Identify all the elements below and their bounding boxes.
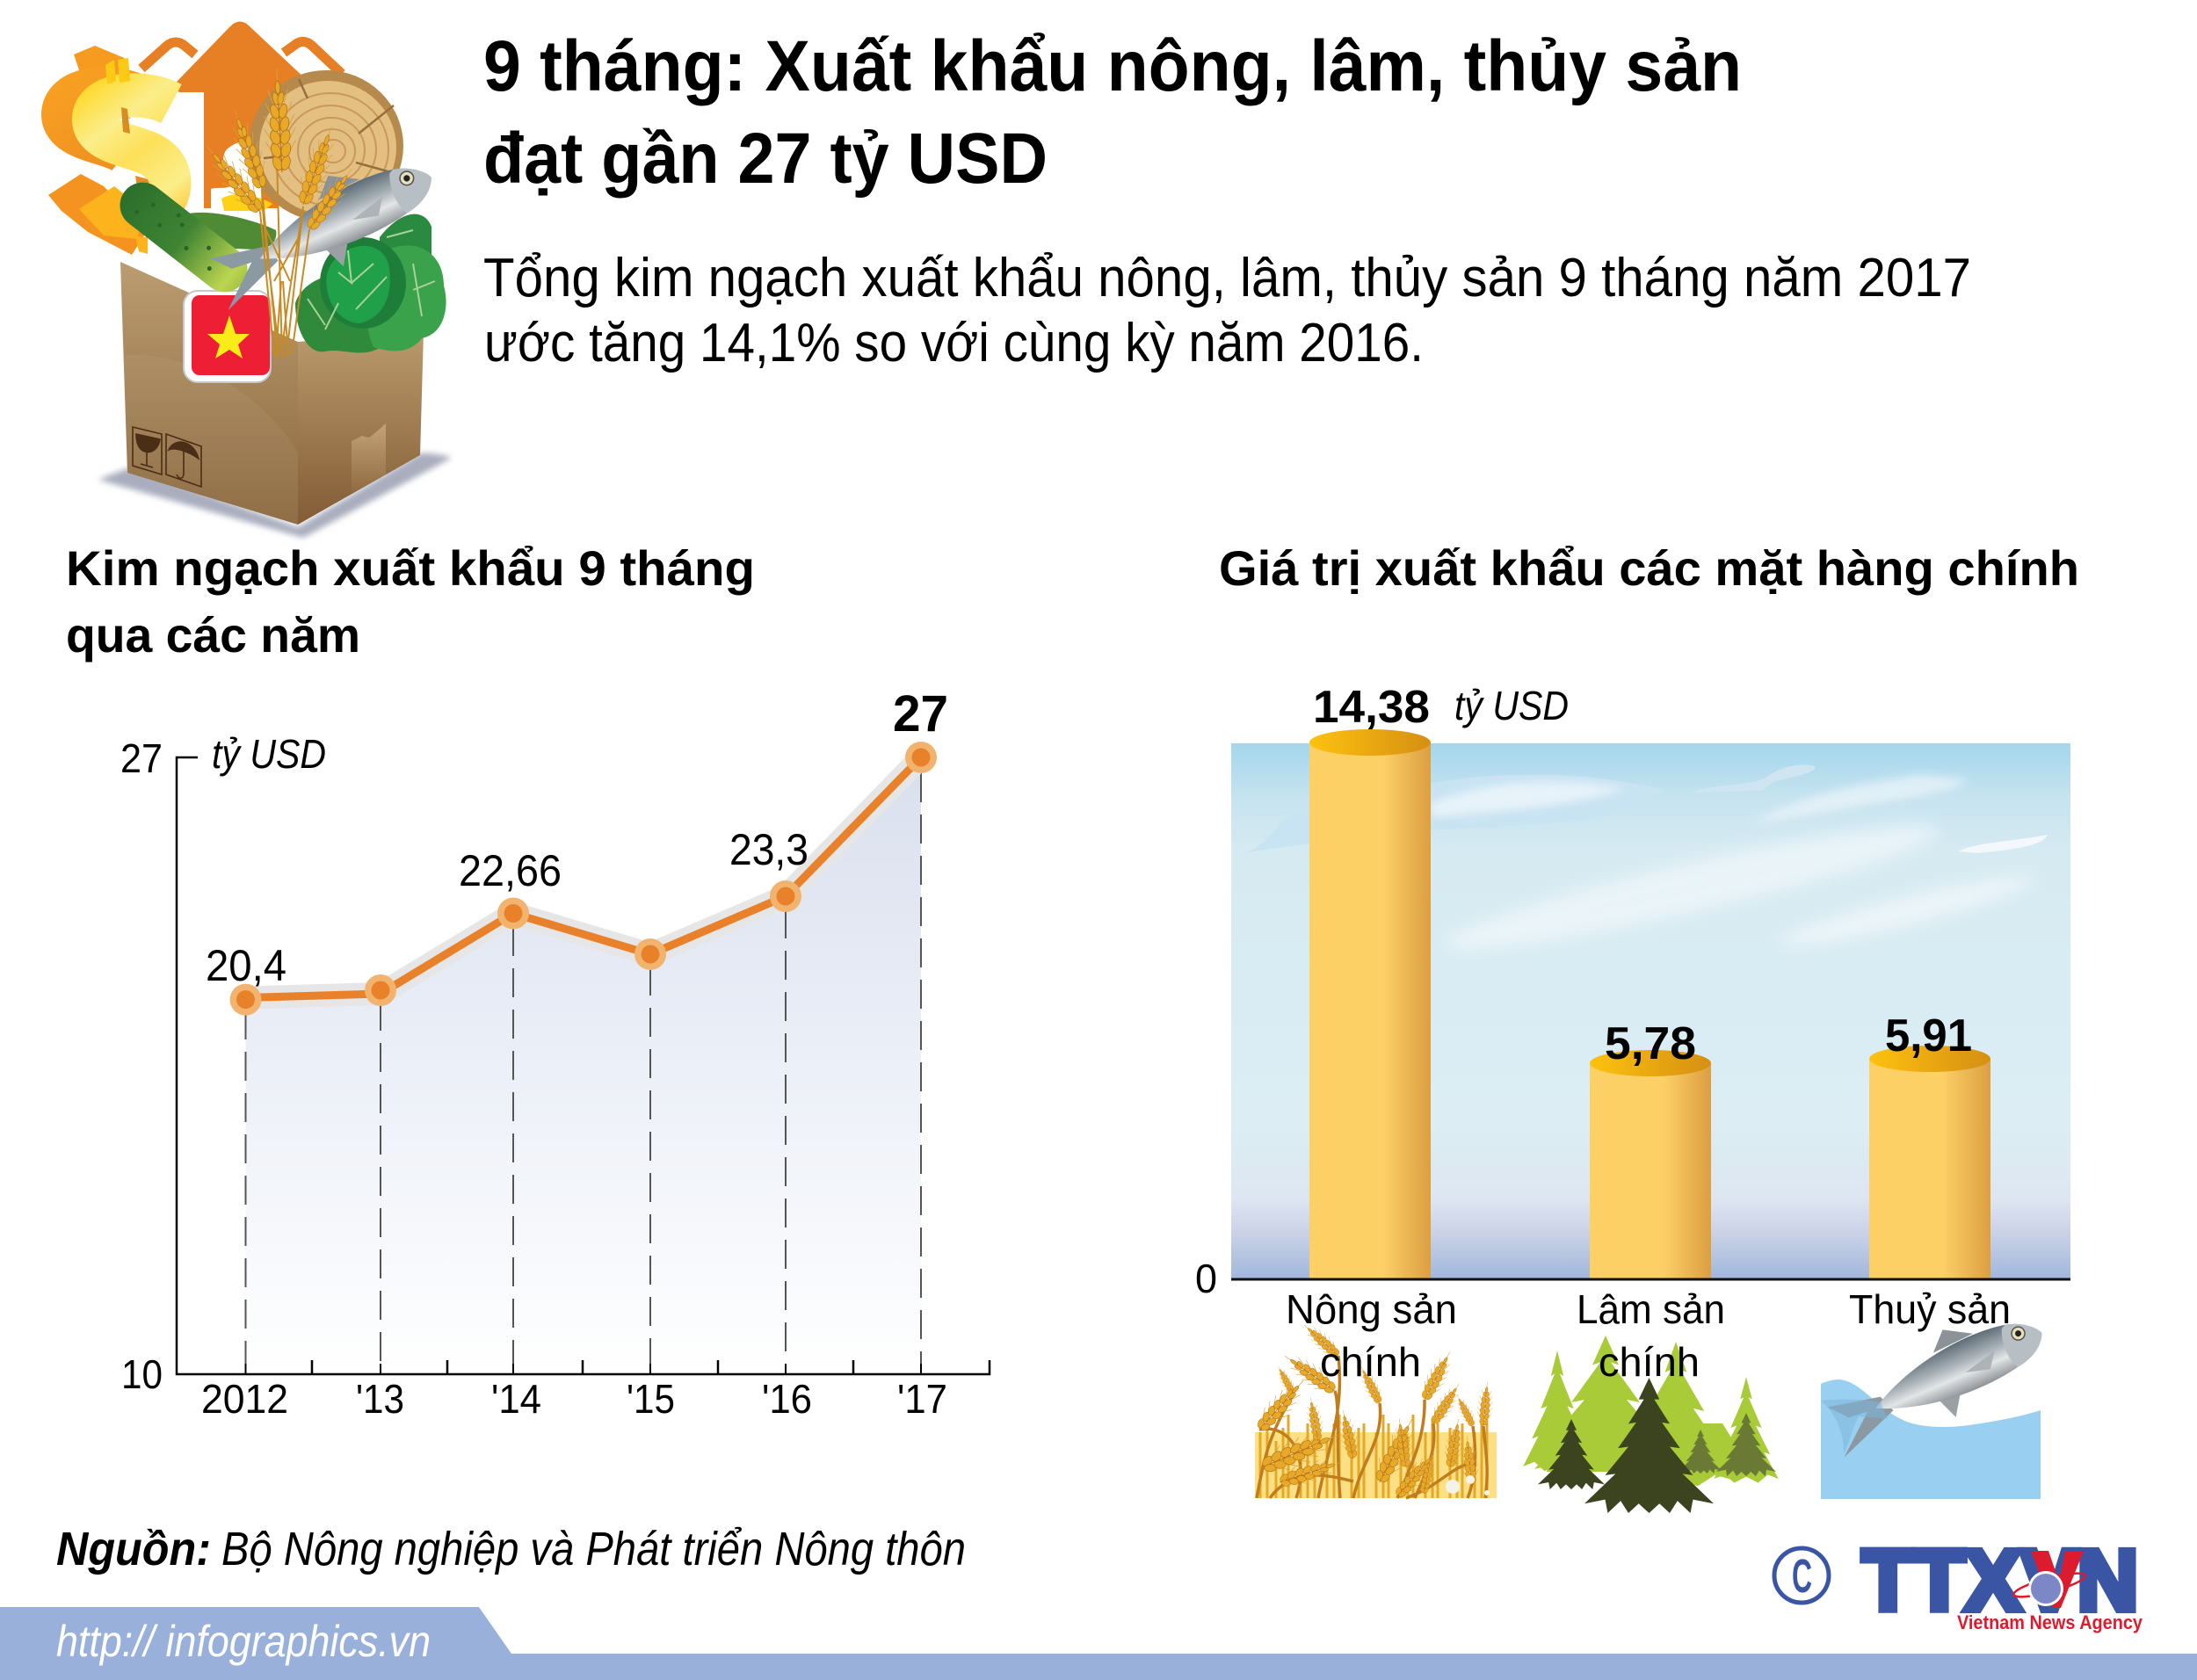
icon: fragile mark (133, 427, 162, 474)
axis labels: tỷ USD (212, 731, 326, 777)
bar chart (1195, 682, 2070, 1301)
copyright mark: C (1792, 1550, 1812, 1603)
axes (177, 757, 990, 1374)
axis labels: 27 (120, 735, 163, 781)
axis labels (120, 731, 947, 1422)
icon: dollar sign (48, 46, 171, 255)
drop lines (246, 773, 921, 1374)
axis labels: '17 (897, 1376, 947, 1422)
icon: Vietnam flag sticker (184, 291, 271, 382)
axis labels: '14 (491, 1376, 541, 1422)
value labels: 22,66 (459, 846, 562, 895)
title: đạt gần 27 tỷ USD (483, 119, 1048, 199)
footer band: http:// infographics.vn (56, 1617, 431, 1666)
sky backdrop (1231, 743, 2070, 1279)
illustration: export box with produce (48, 21, 452, 538)
source note: Bộ Nông nghiệp và Phát triển Nông thôn (221, 1523, 966, 1575)
heading: line chart: Kim ngạch xuất khẩu 9 tháng (66, 540, 755, 596)
bar: Thuỷ sản (1869, 1046, 1990, 1279)
heading: line chart (66, 540, 755, 663)
heading: bar chart: Giá trị xuất khẩu các mặt hàng chính (1219, 540, 2079, 596)
value labels: 20,4 (206, 941, 286, 990)
red V and globe (2012, 1551, 2087, 1608)
line chart (120, 685, 990, 1422)
category labels: chính (1599, 1339, 1700, 1385)
data line (246, 757, 921, 998)
intro text: ước tăng 14,1% so với cùng kỳ năm 2016. (484, 313, 1424, 373)
zero label: 0 (1195, 1256, 1217, 1301)
data markers (230, 742, 937, 1016)
icon: cabbage (295, 214, 446, 352)
TTXVN wordmark: TTXVN (1862, 1532, 2138, 1628)
footer band (0, 1607, 2197, 1680)
source note: Nguồn: (56, 1523, 211, 1575)
category labels (1286, 1286, 2011, 1385)
baseline (1231, 1278, 2070, 1281)
value labels (1313, 682, 1972, 1069)
value labels: 5,78 (1605, 1018, 1696, 1069)
value labels: 23,3 (729, 825, 808, 874)
intro text (483, 248, 1971, 373)
line shadow (246, 757, 921, 998)
axis labels: '16 (762, 1376, 812, 1422)
axis labels: '15 (627, 1376, 675, 1422)
heading: line chart: qua các năm (66, 607, 360, 663)
axis labels: 2012 (201, 1376, 288, 1422)
copyright mark (1774, 1548, 1829, 1603)
axis ticks (246, 1364, 921, 1374)
category labels: chính (1320, 1339, 1421, 1385)
icon: pine forest (1523, 1336, 1779, 1513)
icon: growth arrows (141, 21, 342, 211)
value labels: 5,91 (1885, 1010, 1972, 1061)
bar: Nông sản (1309, 729, 1431, 1279)
value labels (206, 685, 948, 990)
icon: cucumbers (111, 173, 276, 301)
category labels: Lâm sản (1577, 1286, 1725, 1332)
icon: tree log (249, 70, 403, 221)
intro text: Tổng kim ngạch xuất khẩu nông, lâm, thủy sản 9 tháng năm 2017 (483, 248, 1971, 308)
bar: Lâm sản (1590, 1050, 1711, 1279)
value labels: 27 (893, 685, 948, 742)
icon: fish (194, 138, 450, 316)
icon: keep dry mark (166, 434, 201, 487)
icon: fish leaping from water (1813, 1294, 2059, 1499)
title: 9 tháng: Xuất khẩu nông, lâm, thủy sản (483, 26, 1742, 106)
title (483, 26, 1742, 199)
category labels: Nông sản (1286, 1286, 1457, 1332)
axis labels: '13 (356, 1376, 404, 1422)
icon: wheat field (1251, 1319, 1497, 1503)
unit label: tỷ USD (1454, 683, 1569, 728)
agency logo (1774, 1532, 2143, 1633)
value labels: 14,38 (1313, 682, 1430, 733)
area fill (246, 757, 921, 1374)
category labels: Thuỷ sản (1849, 1286, 2011, 1332)
agency name: Vietnam News Agency (1957, 1611, 2143, 1633)
icon: wheat sheaf (198, 69, 360, 358)
icon: cardboard box (98, 262, 452, 538)
axis labels: 10 (121, 1351, 163, 1397)
